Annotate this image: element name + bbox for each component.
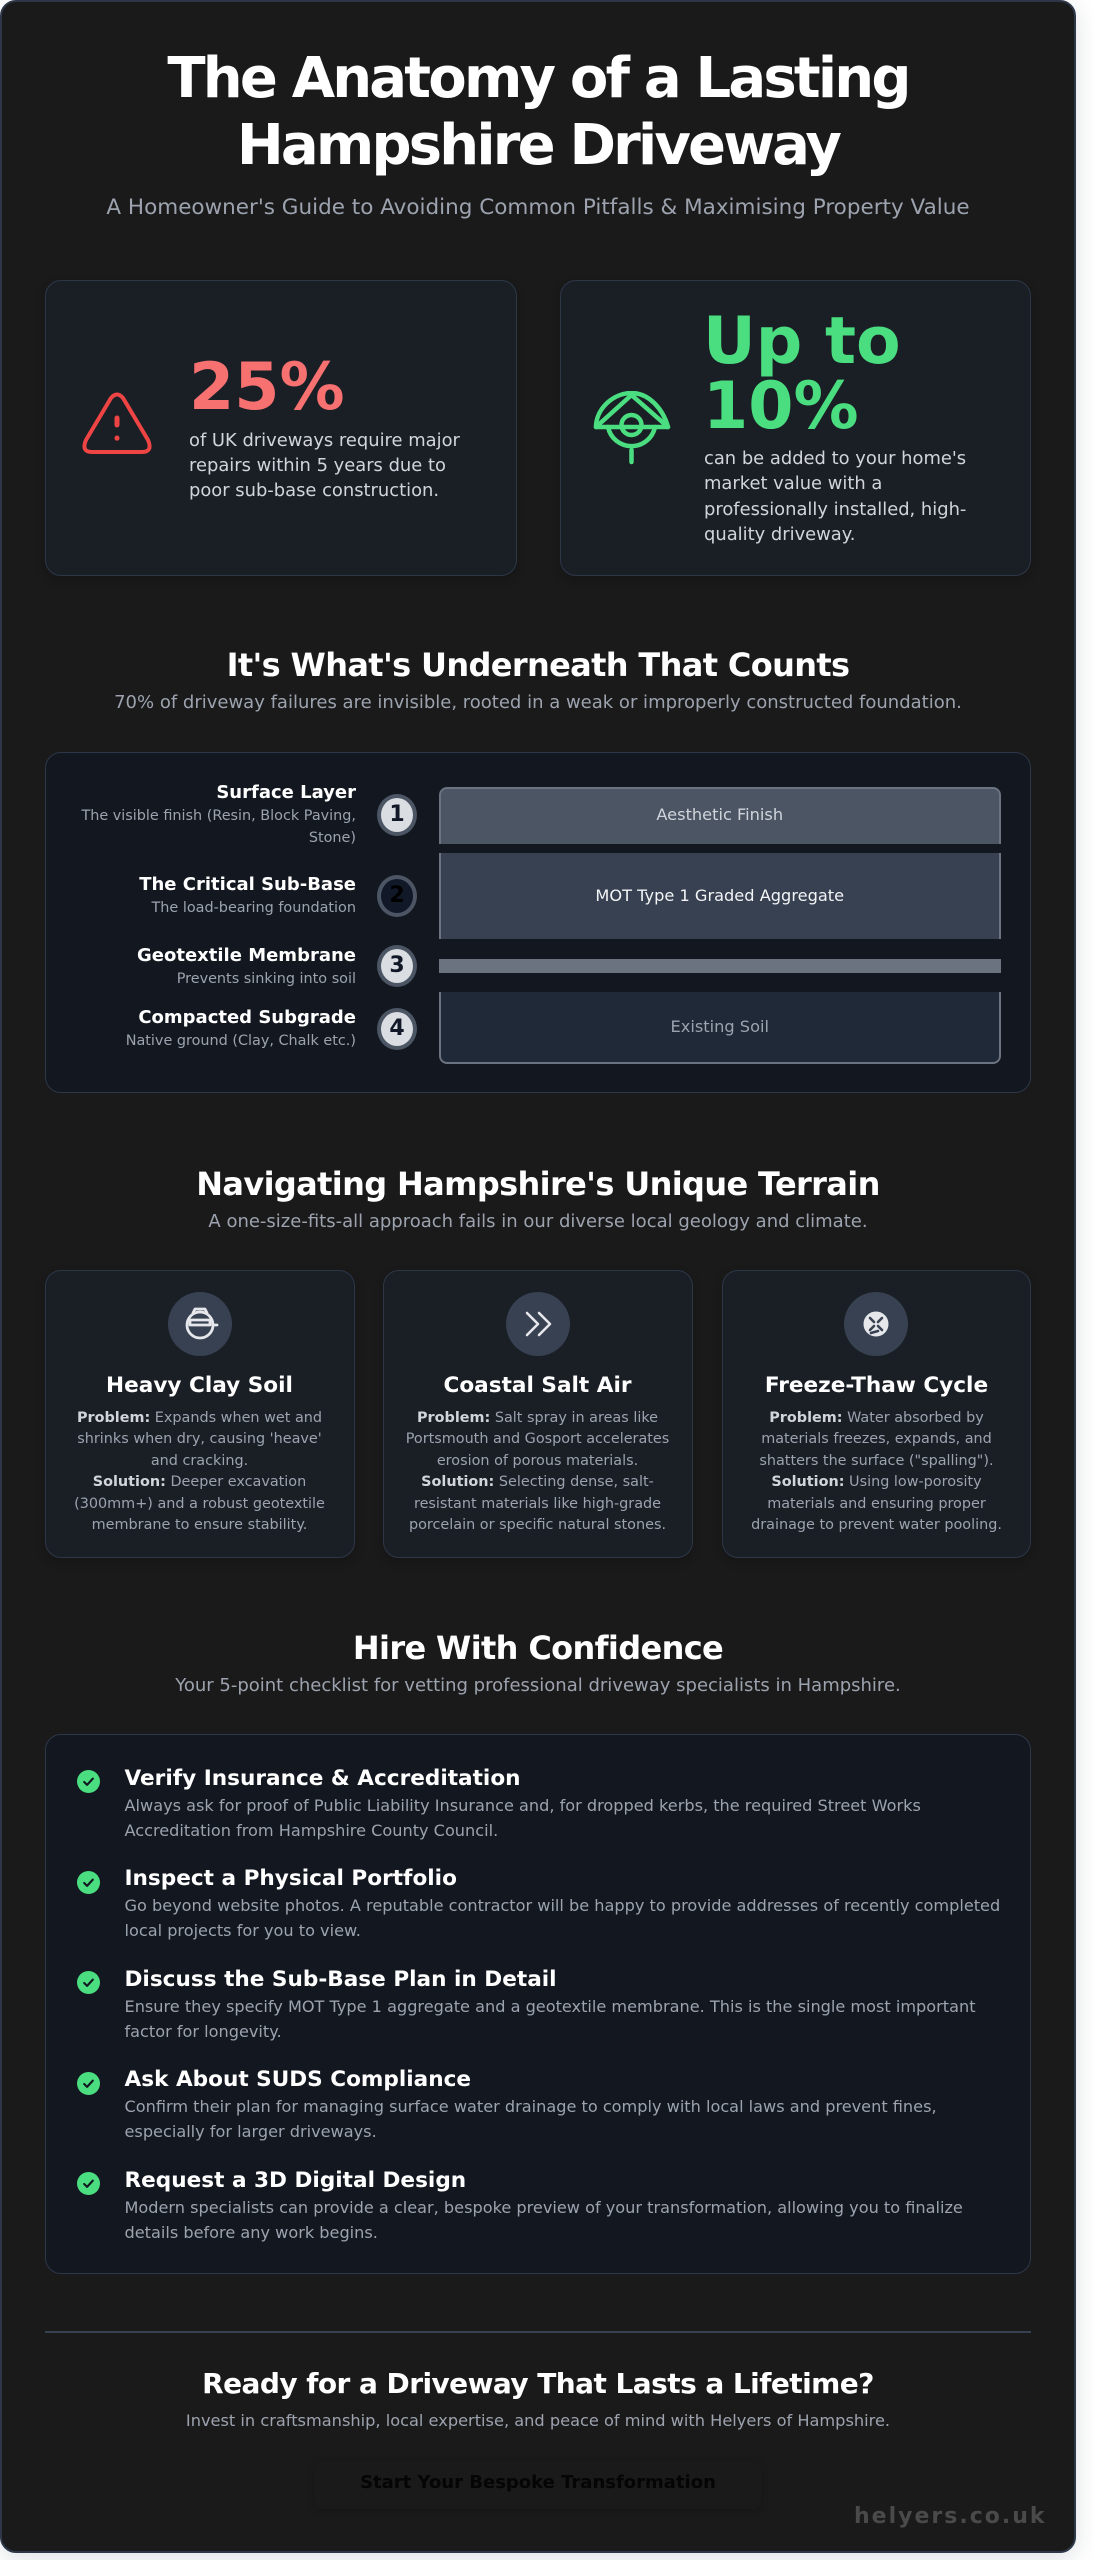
item text 5	[124, 2198, 963, 2242]
number 4: 4	[389, 1016, 405, 1041]
stat description: repairs within 5 years due to	[189, 455, 446, 476]
number 2: 2	[389, 883, 405, 908]
text: coastal salt air: erosion of porous materials.	[437, 1453, 638, 1469]
title	[167, 46, 909, 178]
layer: aesthetic finish: Aesthetic Finish	[656, 805, 783, 824]
subtitle: A Homeowner's Guide to Avoiding Common Pitfalls & Maximising Property Value	[106, 195, 970, 220]
label: compacted subgrade: Native ground (Clay, Chalk etc.)	[126, 1033, 356, 1049]
label: critical sub-base: The Critical Sub-Base	[139, 874, 356, 895]
item title 2: Inspect a Physical Portfolio	[124, 1866, 457, 1891]
stat description: of UK driveways require major	[189, 430, 460, 450]
text: coastal salt air: resistant materials like high-grade	[414, 1496, 661, 1512]
heading: call to action: Ready for a Driveway That Lasts a Lifetime?	[202, 2367, 874, 2400]
text: heavy clay soil: Solution: Deeper excavation	[93, 1474, 306, 1490]
stat value: up to 10%: Up to	[703, 304, 901, 379]
label: geotextile membrane	[137, 944, 356, 986]
number 2	[377, 875, 417, 917]
text: coastal salt air: Problem: Salt spray in areas like	[417, 1410, 658, 1426]
subheading: hire: Your 5-point checklist for vetting professional driveway specialists in Hampshire.	[175, 1674, 901, 1696]
text: heavy clay soil: and cracking.	[151, 1453, 248, 1469]
panel: 25% statistic	[45, 280, 517, 576]
text: coastal salt air: Solution: Selecting dense, salt-	[421, 1474, 654, 1490]
item text 2: local projects for you to view.	[124, 1921, 361, 1940]
heading: underneath: It's What's Underneath That Counts	[227, 646, 849, 684]
stat description: quality driveway.	[704, 524, 855, 545]
item text 3	[124, 1996, 976, 2040]
heading: hire: Hire With Confidence	[353, 1629, 723, 1667]
stat description	[704, 448, 966, 545]
label: surface layer: The visible finish (Resin, Block Paving,	[81, 808, 356, 824]
item text 2: Go beyond website photos. A reputable contractor will be happy to provide addresses of recently completed	[124, 1896, 1000, 1915]
title: The Anatomy of a Lasting	[167, 46, 909, 111]
text: call to action: Invest in craftsmanship, local expertise, and peace of mind with Helyers of Hampshire.	[186, 2411, 890, 2430]
text: coastal salt air: porcelain or specific natural stones.	[409, 1517, 666, 1533]
text: heavy clay soil: (300mm+) and a robust geotextile	[74, 1496, 325, 1512]
stat description: professionally installed, high-	[704, 499, 966, 520]
item text 5: details before any work begins.	[124, 2222, 378, 2242]
panel: freeze-thaw cycle	[722, 1270, 1031, 1558]
check icon 3	[77, 1971, 100, 1994]
item text 3: factor for longevity.	[124, 2022, 282, 2040]
layer: existing soil: Existing Soil	[671, 1017, 769, 1036]
label: surface layer	[81, 782, 356, 846]
item text 5: Modern specialists can provide a clear, bespoke preview of your transformation, allowing you to finalize	[124, 2198, 963, 2216]
stat description: poor sub-base construction.	[189, 480, 439, 501]
text: freeze-thaw cycle: Problem: Water absorbed by	[769, 1410, 984, 1426]
button: start transformation: Start Your Bespoke Transformation	[360, 2472, 716, 2493]
text: heavy clay soil: shrinks when dry, causing 'heave'	[77, 1431, 322, 1447]
icon: frost wheel	[844, 1292, 908, 1356]
label: surface layer: Stone)	[309, 830, 356, 846]
icon: warning triangle	[82, 392, 152, 454]
watermark: helyers.co.uk	[854, 2504, 1046, 2529]
stat value: 25%: 25%	[189, 350, 345, 424]
text: heavy clay soil: membrane to ensure stability.	[92, 1517, 307, 1533]
number 4	[377, 1008, 417, 1050]
layer: MOT type 1: MOT Type 1 Graded Aggregate	[595, 886, 844, 905]
item text 3: Ensure they specify MOT Type 1 aggregate and a geotextile membrane. This is the single most important	[124, 1996, 976, 2016]
panel: coastal salt air	[383, 1270, 693, 1558]
panel: heavy clay soil	[45, 1270, 355, 1558]
label: compacted subgrade: Compacted Subgrade	[138, 1007, 356, 1028]
stat description	[189, 430, 460, 501]
number 3	[377, 945, 417, 987]
text: freeze-thaw cycle: materials freezes, expands, and	[761, 1431, 992, 1447]
button: start transformation	[315, 2461, 761, 2509]
number 1: 1	[389, 802, 405, 827]
text: coastal salt air	[406, 1410, 669, 1533]
item title 1: Verify Insurance & Accreditation	[124, 1766, 521, 1790]
check icon 4	[77, 2072, 100, 2095]
label: critical sub-base	[139, 874, 356, 916]
item text 2	[124, 1896, 1000, 1940]
item text 4: Confirm their plan for managing surface water drainage to comply with local laws and prevent fines,	[124, 2097, 937, 2116]
check icon 1	[77, 1770, 100, 1793]
item title 5: Request a 3D Digital Design	[124, 2168, 466, 2192]
item title 4: Ask About SUDS Compliance	[124, 2067, 471, 2092]
label: geotextile membrane: Geotextile Membrane	[137, 944, 356, 966]
item text 4	[124, 2097, 937, 2141]
item text 1: Always ask for proof of Public Liability Insurance and, for dropped kerbs, the required Street Works	[124, 1796, 921, 1814]
icon: helmet	[168, 1292, 232, 1356]
panel: driveway cross-section	[45, 752, 1031, 1093]
label: surface layer: Surface Layer	[216, 782, 356, 803]
text: freeze-thaw cycle: shatters the surface ("spalling").	[759, 1453, 994, 1469]
stat value: up to 10%	[703, 304, 901, 444]
layer: MOT type 1	[438, 853, 1001, 939]
subheading: underneath: 70% of driveway failures are invisible, rooted in a weak or improperly constructed foundation.	[114, 692, 962, 713]
item text 1: Accreditation from Hampshire County Council.	[124, 1820, 498, 1840]
text: heavy clay soil: Problem: Expands when wet and	[77, 1410, 322, 1426]
heading: coastal salt air: Coastal Salt Air	[443, 1372, 632, 1398]
text: freeze-thaw cycle	[751, 1410, 1002, 1533]
item text 4: especially for larger driveways.	[124, 2122, 377, 2141]
stat value: up to 10%: 10%	[703, 369, 859, 444]
heading: freeze-thaw cycle: Freeze-Thaw Cycle	[765, 1372, 988, 1398]
heading: terrain: Navigating Hampshire's Unique Terrain	[196, 1165, 880, 1203]
stat description: market value with a	[704, 473, 882, 494]
check icon 2	[77, 1871, 100, 1894]
panel: 10% statistic	[560, 280, 1031, 576]
heading: heavy clay soil: Heavy Clay Soil	[106, 1372, 293, 1398]
item title 3: Discuss the Sub-Base Plan in Detail	[124, 1966, 557, 1992]
text: heavy clay soil	[74, 1410, 325, 1533]
layer: aesthetic finish	[438, 787, 1001, 844]
number 3: 3	[389, 953, 405, 978]
label: geotextile membrane: Prevents sinking into soil	[177, 970, 356, 986]
title: Hampshire Driveway	[237, 113, 839, 178]
layer: existing soil	[438, 992, 1001, 1064]
icon: double chevron	[506, 1292, 570, 1356]
icon: home value target	[594, 391, 670, 464]
text: freeze-thaw cycle: drainage to prevent water pooling.	[751, 1517, 1002, 1533]
layer: geotextile	[438, 958, 1001, 973]
panel: checklist	[45, 1734, 1031, 2274]
check icon 5	[77, 2172, 100, 2195]
text: coastal salt air: Portsmouth and Gosport accelerates	[406, 1431, 669, 1447]
text: freeze-thaw cycle: materials and ensuring proper	[767, 1496, 986, 1512]
stat description: can be added to your home's	[704, 448, 966, 469]
item text 1	[124, 1796, 921, 1840]
number 1	[377, 794, 417, 836]
label: critical sub-base: The load-bearing foundation	[152, 900, 356, 916]
text: freeze-thaw cycle: Solution: Using low-porosity	[771, 1474, 982, 1490]
label: compacted subgrade	[126, 1007, 356, 1049]
subheading: terrain: A one-size-fits-all approach fails in our diverse local geology and climate.	[208, 1211, 868, 1232]
